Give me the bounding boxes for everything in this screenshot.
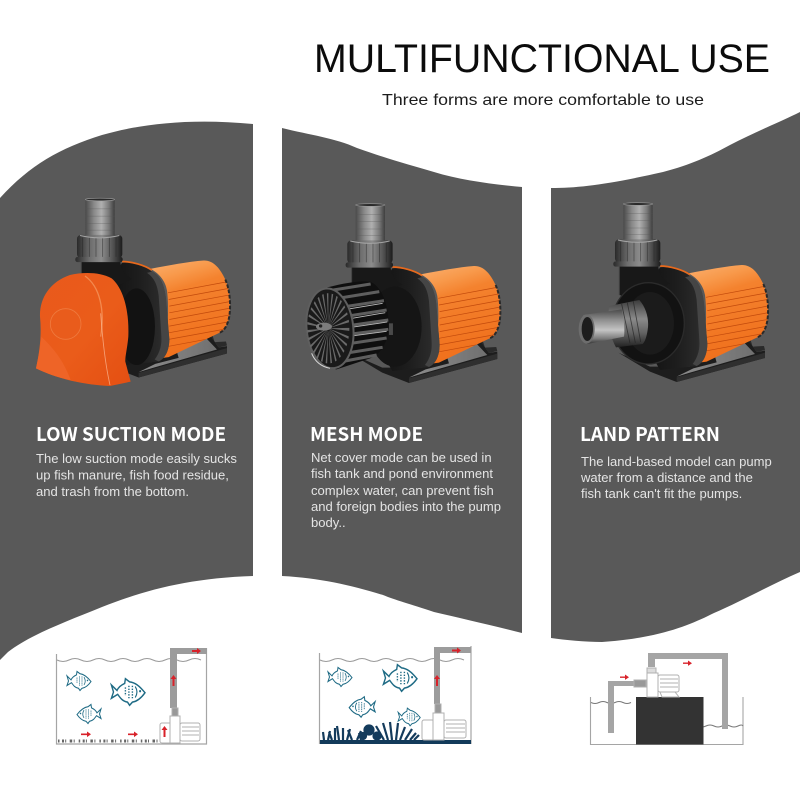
description: The land-based model can pump xyxy=(581,454,772,469)
description: The low suction mode easily sucks xyxy=(36,451,237,466)
heading: LOW SUCTION MODE xyxy=(36,420,226,447)
panel: low suction mode xyxy=(0,122,253,660)
seabed xyxy=(320,740,471,744)
heading: MESH MODE xyxy=(310,420,423,447)
panel background xyxy=(0,122,253,660)
flow arrows xyxy=(620,660,692,680)
outlet pipe xyxy=(170,648,207,708)
description: fish tank can't fit the pumps. xyxy=(581,486,742,501)
description: body.. xyxy=(311,515,346,530)
gravel xyxy=(58,740,165,742)
tank outline xyxy=(320,646,471,744)
outlet pipe xyxy=(648,653,728,729)
description: water from a distance and the xyxy=(580,470,753,485)
panel background xyxy=(551,112,800,642)
pump illustration xyxy=(634,668,679,697)
outlet pipe xyxy=(434,647,471,704)
product photo: pump with mesh cover xyxy=(303,204,501,383)
inlet pipe xyxy=(608,681,636,733)
flow arrows xyxy=(81,648,201,737)
water line xyxy=(320,658,464,662)
description: complex water, can prevent fish xyxy=(311,483,494,498)
water lines xyxy=(591,702,743,727)
description: up fish manure, fish food residue, xyxy=(36,468,229,482)
heading: LAND PATTERN xyxy=(580,420,720,447)
pump illustration xyxy=(160,708,200,743)
product photo: pump with low suction cover xyxy=(36,198,230,386)
description: and trash from the bottom. xyxy=(36,484,189,499)
corals xyxy=(323,722,419,740)
fish xyxy=(328,665,420,726)
title: MULTIFUNCTIONAL USE xyxy=(314,37,770,81)
tank outline xyxy=(56,648,206,744)
pump illustration xyxy=(422,704,466,740)
panel: land pattern xyxy=(551,112,800,642)
panel: mesh mode xyxy=(282,128,522,633)
panel background xyxy=(282,128,522,633)
diagram: mesh cover in tank xyxy=(320,646,471,744)
stand block xyxy=(636,697,704,744)
subtitle: Three forms are more comfortable to use xyxy=(382,92,704,109)
tank outline xyxy=(590,697,743,744)
flow arrows xyxy=(434,648,461,686)
fish xyxy=(67,671,145,724)
product photo: land-based pump xyxy=(579,203,768,382)
diagram: land-based pump xyxy=(590,653,743,744)
diagram: low suction in tank xyxy=(56,648,207,744)
description: fish tank and pond environment xyxy=(311,466,493,481)
description: and foreign bodies into the pump xyxy=(311,499,501,514)
water line xyxy=(57,658,201,662)
description: Net cover mode can be used in xyxy=(311,450,492,465)
